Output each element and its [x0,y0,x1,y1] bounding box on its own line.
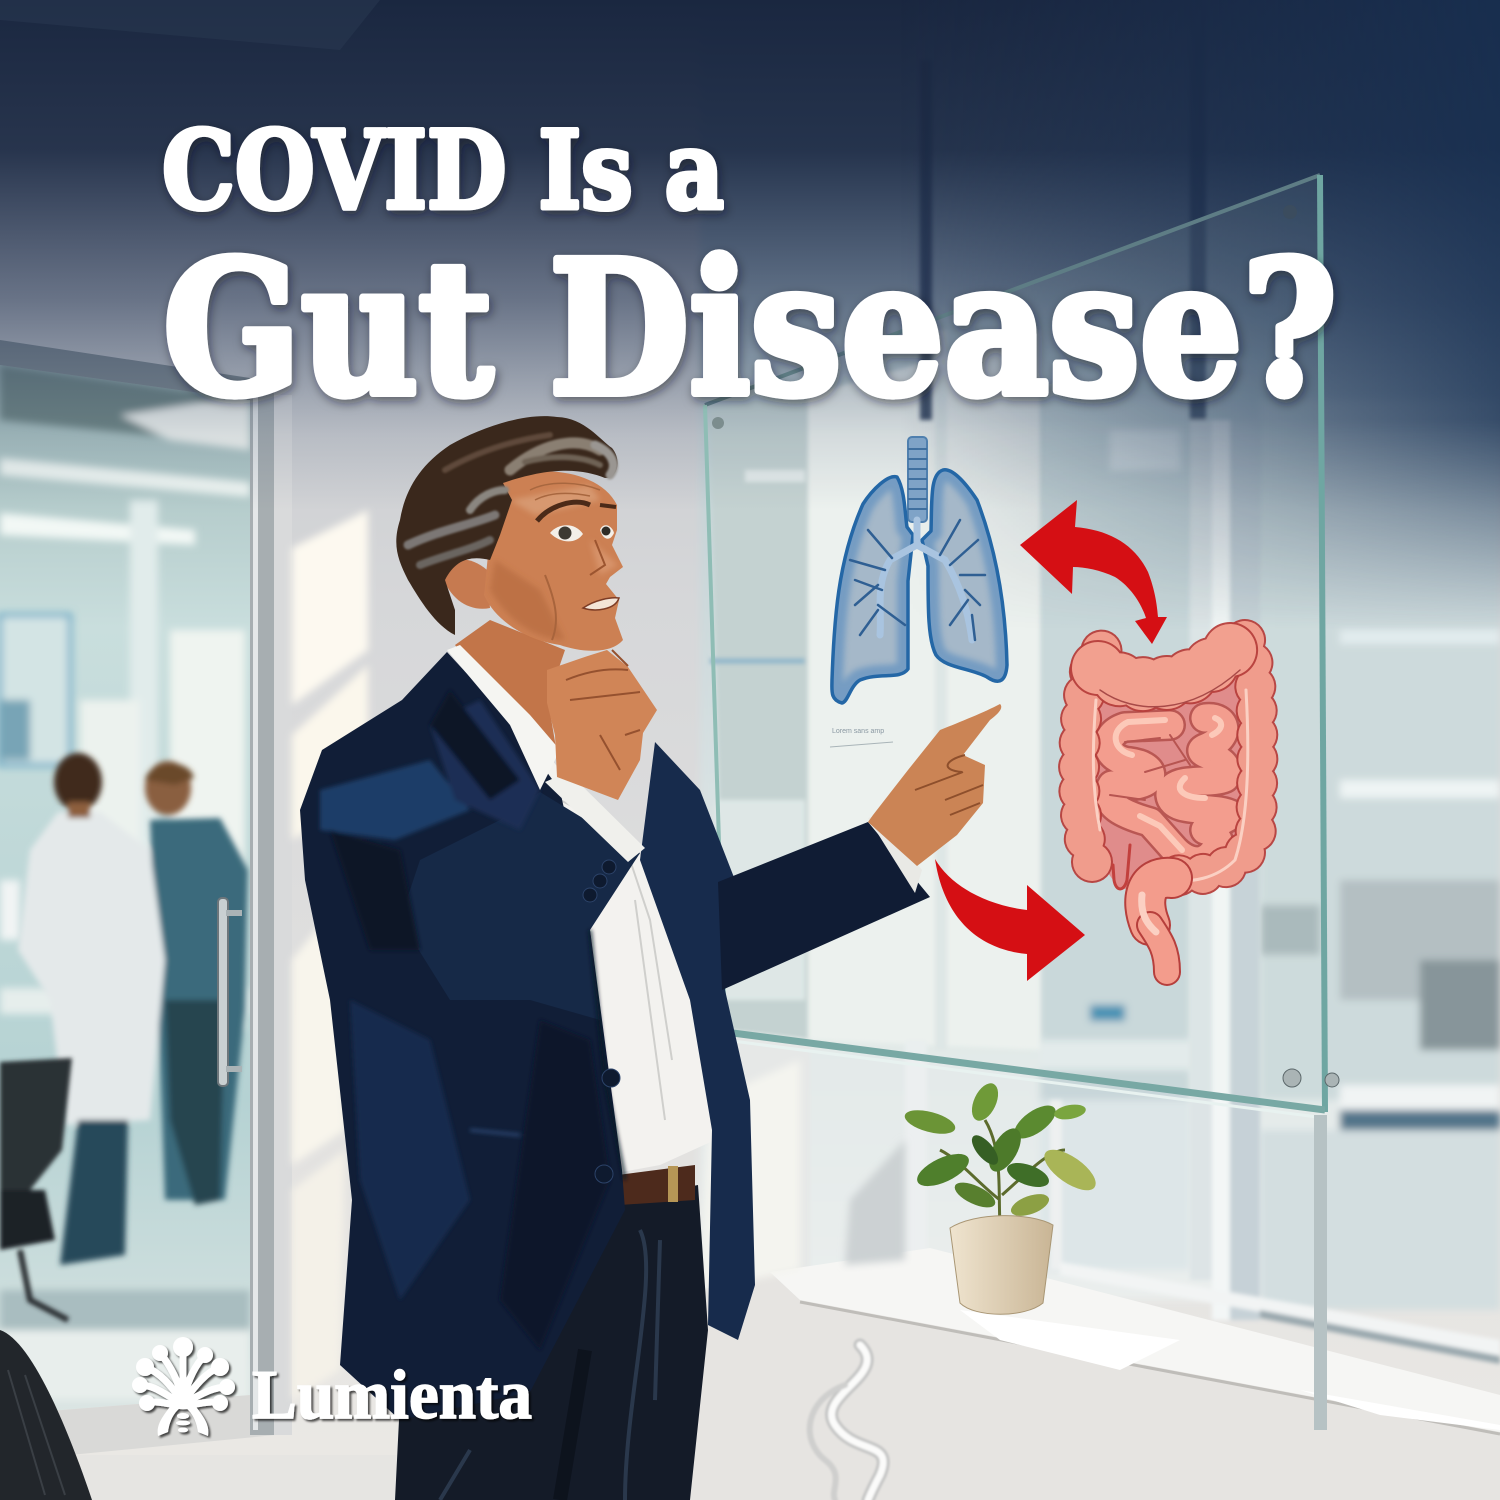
title [162,108,1337,437]
jeans [395,1185,708,1500]
glass panel [705,175,1339,1430]
chair at bottom left [0,1330,92,1500]
plant in pot [902,1079,1102,1314]
hair grey strands [408,435,614,565]
figure: doctors in the background [18,753,248,1265]
brand logo [132,1337,532,1436]
pointing hand [868,704,1001,866]
window frames [720,0,1500,1364]
illustration: lungs [832,437,1007,703]
arrow: curved arrow pointing to intestine [935,859,1085,981]
white shirt [445,655,715,1172]
illustration: intestines [1079,640,1257,972]
door frame [0,340,400,1500]
panel: left glass door and clinic interior [0,340,400,1500]
small caption on glass [830,728,893,747]
ear [442,559,490,609]
hand on chin [547,650,657,800]
appendix [1113,845,1130,889]
glass support post [1314,1115,1327,1430]
shirt cuffs [545,772,922,893]
pot [950,1216,1053,1314]
title line 2: Gut Disease? [163,221,1337,437]
left lung [832,477,913,703]
belt [618,1165,695,1205]
logo icon: branching tree with bee [132,1337,235,1436]
eyes and facial features [530,483,619,640]
navy jacket body [300,652,625,1420]
windowsill [690,1248,1500,1500]
raised arm sleeve [400,792,640,1020]
hair [396,416,618,635]
jacket buttons [583,860,620,1183]
colon [1079,640,1257,972]
door handle [218,898,242,1086]
panel: laboratory behind window [700,0,1500,1310]
face [484,471,623,651]
face shading [490,485,618,640]
plant leaves [902,1079,1102,1225]
small caption on glass: Lorem sans amp [832,728,884,735]
arrow: lungs and gut curved double arrow [1020,500,1167,644]
title line 1: COVID Is a [162,108,724,234]
jacket right panel [640,742,755,1340]
trachea [908,437,927,522]
dark top overlay [0,0,1500,618]
cavity behind small intestine [1085,660,1255,890]
man [300,416,1001,1500]
neck [455,620,565,760]
shirt collar [447,645,560,790]
pointing arm sleeve [718,822,930,990]
sunlight patches on wall [292,510,905,1400]
jacket shading and lapel [320,690,625,1350]
right lung [922,470,1007,681]
office chair [0,1058,72,1320]
panel: white wall behind glass [710,330,1040,1050]
bronchial tree [850,520,985,640]
small intestine coils [1109,718,1232,861]
logo wordmark: Lumienta [252,1357,532,1434]
steam [810,1345,883,1500]
